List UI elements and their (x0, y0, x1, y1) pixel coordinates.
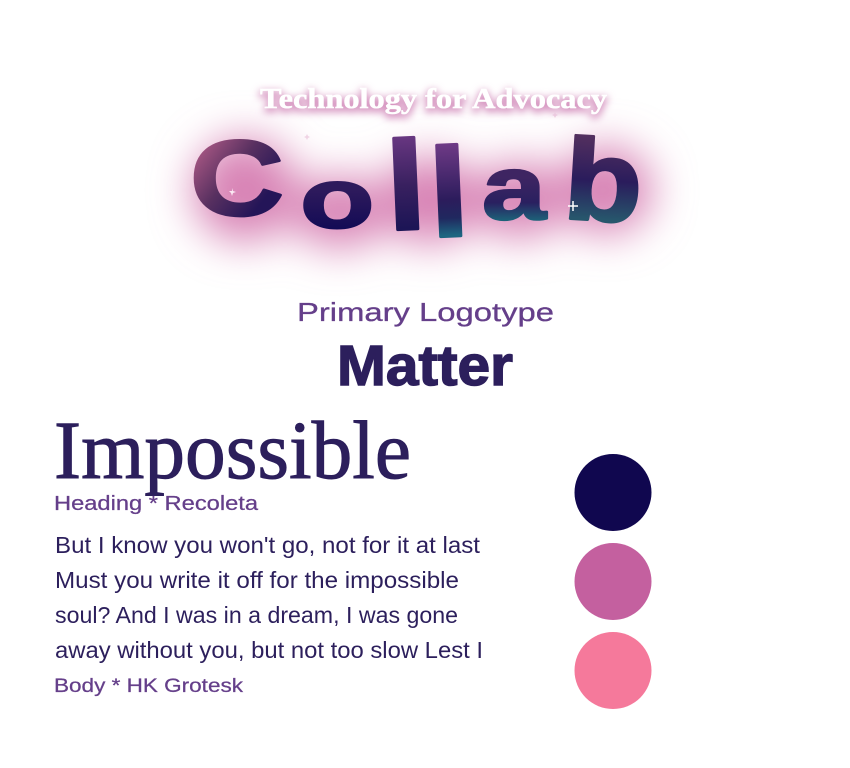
letter l: l (426, 121, 472, 264)
letter o: o (300, 152, 375, 246)
label: primary logotype: Primary Logotype (297, 297, 554, 327)
colour swatch: magenta (574, 543, 652, 620)
body text sample: away without you, but not too slow Lest I (55, 637, 483, 663)
heading sample: Impossible: Impossible (54, 404, 411, 496)
body text sample: soul? And I was in a dream, I was gone (55, 602, 458, 628)
letter C: C (190, 119, 284, 238)
logo glow (193, 138, 652, 248)
body text sample: Must you write it off for the impossible (55, 567, 459, 593)
colour swatch: pink (574, 632, 652, 709)
logo wordmark: Collab (190, 114, 646, 264)
letter a: a (482, 137, 547, 238)
label: body font: Body * HK Grotesk (54, 675, 243, 697)
letter l: l (383, 114, 429, 257)
sparkles (229, 112, 578, 211)
tagline: Technology for Advocacy (260, 84, 607, 115)
colour swatch: navy (574, 454, 652, 531)
font name: Matter: Matter (337, 334, 513, 398)
body text sample (55, 532, 483, 663)
label: heading font: Heading * Recoleta (54, 493, 259, 515)
body text sample: But I know you won't go, not for it at last (55, 532, 481, 558)
letter b: b (560, 114, 646, 247)
